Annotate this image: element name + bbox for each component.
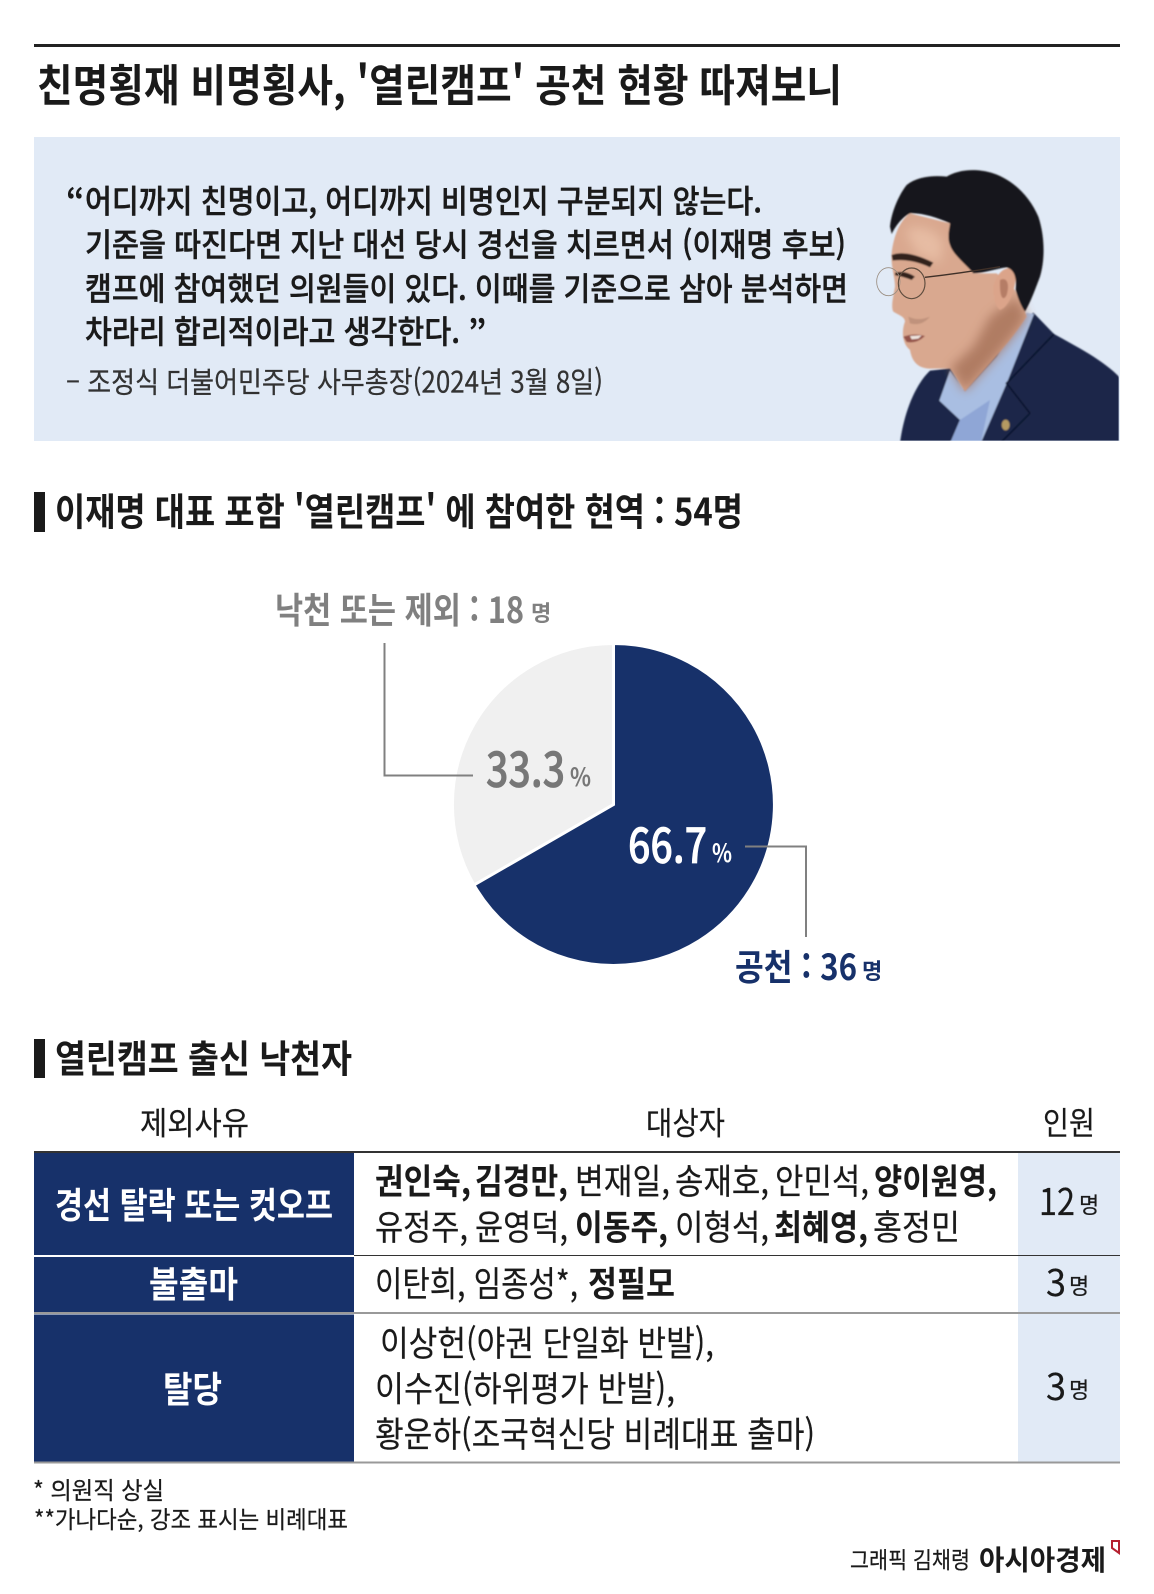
credit: 아시아경제	[979, 1539, 1106, 1579]
names line 2: 유정주,	[375, 1200, 468, 1251]
footnotes	[33, 1471, 348, 1535]
table	[34, 1098, 1120, 1464]
panel: quote	[34, 137, 1121, 443]
count: 12	[1039, 1172, 1075, 1226]
table header: 제외사유	[140, 1098, 249, 1144]
credit: 그래픽 김채령	[850, 1541, 970, 1575]
names line 2: 이동주,	[575, 1200, 668, 1251]
credit	[850, 1539, 1119, 1579]
footnotes: **가나다순, 강조 표시는 비례대표	[34, 1500, 348, 1535]
table header: 대상자	[646, 1098, 725, 1144]
label: excluded count: 명	[531, 596, 551, 628]
table header	[140, 1098, 1095, 1144]
heading: camp members: 이재명 대표 포함 '열린캠프' 에 참여한 현역 : 54명	[55, 482, 743, 536]
names line 1: 송재호,	[675, 1154, 769, 1205]
count: 3	[1046, 1253, 1066, 1307]
names line 1: 권인숙,	[375, 1154, 471, 1205]
label: nominated count: 명	[862, 954, 882, 986]
title: 친명횡재 비명횡사, '열린캠프' 공천 현황 따져보니	[37, 50, 842, 114]
count: 명	[1069, 1269, 1089, 1301]
quote attribution: – 조정식 더불어민주당 사무총장(2024년 3월 8일)	[66, 360, 603, 402]
count: 3	[1046, 1357, 1066, 1411]
heading: losers: 열린캠프 출신 낙천자	[55, 1028, 352, 1084]
pie chart	[275, 582, 882, 991]
label: nominated percent: %	[712, 834, 732, 870]
table header: 인원	[1043, 1098, 1095, 1144]
label: excluded percent: %	[570, 758, 591, 794]
row: left party: 이상헌(야권 단일화 반발),	[380, 1316, 714, 1367]
names line 2: 이형석,	[675, 1200, 769, 1251]
label: excluded percent: 33.3	[486, 731, 565, 801]
icon: portrait of speaker	[877, 170, 1121, 443]
names line 1: 변재일,	[575, 1154, 670, 1205]
names line 1	[375, 1154, 997, 1205]
quote text: 기준을 따진다면 지난 대선 당시 경선을 치르면서 (이재명 후보)	[85, 220, 846, 266]
row: cutoff: 경선 탈락 또는 컷오프	[55, 1177, 333, 1229]
count	[1039, 1172, 1099, 1226]
quote text: 캠프에 참여했던 의원들이 있다. 이때를 기준으로 삼아 분석하면	[85, 264, 848, 310]
count: 명	[1079, 1188, 1099, 1220]
names line 2: 최혜영,	[774, 1200, 868, 1251]
quote text: “	[66, 176, 84, 222]
row: not running	[149, 1253, 1089, 1308]
leader line: excluded	[384, 643, 473, 776]
quote text: 차라리 합리적이라고 생각한다.	[85, 307, 460, 353]
row: left party: 이수진(하위평가 반발),	[375, 1362, 675, 1412]
icon: red logo mark	[1112, 1541, 1119, 1553]
quote text: 어디까지 친명이고, 어디까지 비명인지 구분되지 않는다.	[85, 176, 762, 222]
row: cutoff	[55, 1154, 1099, 1251]
row: not running: 이탄희, 임종성*,	[375, 1256, 578, 1308]
quote text	[66, 176, 848, 353]
names line 2	[375, 1200, 960, 1251]
footnotes: * 의원직 상실	[33, 1471, 164, 1506]
quote text: ”	[468, 307, 486, 353]
names line 1: 김경만,	[475, 1154, 568, 1205]
pie slice: excluded 33.3%	[452, 643, 614, 885]
label: nominated percent: 66.7	[628, 807, 707, 877]
names line 1: 양이원영,	[874, 1154, 997, 1205]
row: not running: 정필모	[588, 1256, 675, 1308]
names line 2: 홍정민	[873, 1200, 960, 1251]
pie slice: nominated 66.7%	[474, 644, 774, 966]
label: nominated count: 공천 : 36	[735, 939, 857, 991]
leader line: nominated	[745, 846, 806, 937]
count	[1046, 1357, 1089, 1411]
row: not running: 불출마	[149, 1256, 238, 1308]
names line 2: 윤영덕,	[475, 1200, 568, 1251]
row: left party: 탈당	[163, 1361, 222, 1413]
names line 1: 안민석,	[775, 1154, 869, 1205]
row: left party	[163, 1316, 1089, 1458]
label: excluded count: 낙천 또는 제외 : 18	[275, 582, 524, 634]
row: left party: 황운하(조국혁신당 비례대표 출마)	[375, 1407, 815, 1458]
count: 명	[1069, 1373, 1089, 1405]
count	[1046, 1253, 1089, 1307]
